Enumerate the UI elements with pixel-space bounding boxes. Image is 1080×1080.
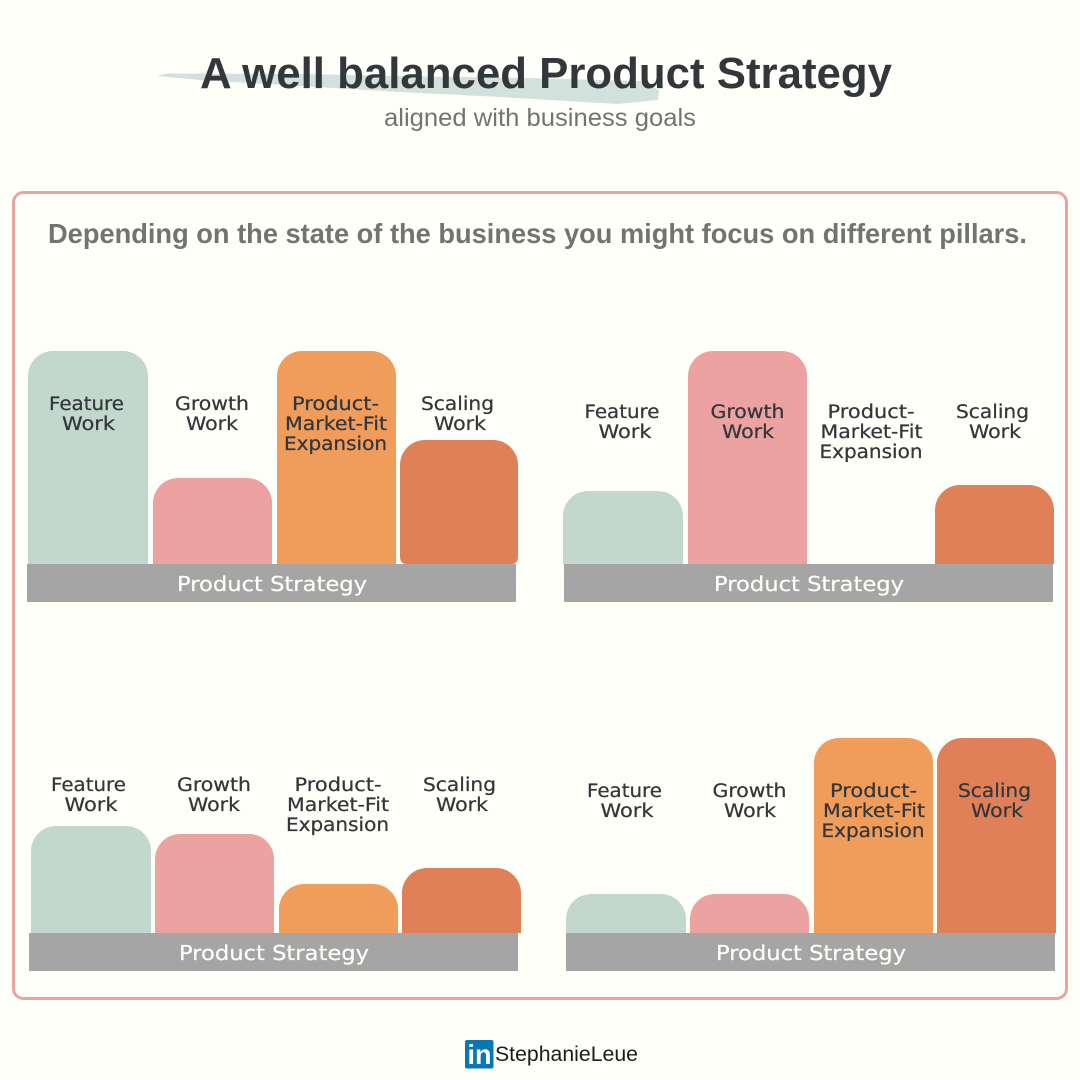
bar: growth work: [690, 894, 809, 933]
labels: Work: [436, 795, 488, 816]
bar: scaling work: [935, 485, 1054, 564]
labels: Product-: [294, 775, 382, 796]
chart 3: balanced focus: [29, 775, 521, 971]
labels: Work: [188, 795, 240, 816]
labels: Scaling: [421, 394, 494, 415]
labels: [587, 781, 1031, 842]
labels: Growth: [177, 775, 251, 796]
panel heading: Depending on the state of the business you might focus on different pillars.: [48, 218, 1027, 249]
labels: Feature: [584, 402, 660, 423]
labels: Scaling: [958, 781, 1031, 802]
base: product strategy: Product Strategy: [716, 941, 906, 965]
labels: Growth: [710, 402, 784, 423]
bar: feature work: [563, 491, 683, 564]
labels: Work: [186, 414, 238, 435]
labels: Expansion: [820, 442, 922, 463]
base: product strategy: [27, 564, 516, 602]
labels: Feature: [49, 394, 124, 415]
labels: Feature: [587, 781, 662, 802]
labels: [584, 402, 1029, 463]
icon: linkedin: in: [468, 1039, 492, 1070]
bar: growth work: [155, 834, 274, 933]
labels: Work: [598, 422, 652, 443]
labels: Market-Fit: [287, 795, 389, 816]
labels: Work: [600, 801, 654, 822]
base: product strategy: [29, 933, 518, 971]
bar: product-market-fit expansion: [279, 884, 398, 933]
labels: [49, 394, 494, 455]
footer: linkedin handle: [465, 1039, 638, 1070]
base: product strategy: Product Strategy: [179, 941, 369, 965]
labels: Growth: [712, 781, 786, 802]
chart 1: feature and product-market-fit focus: [27, 351, 518, 602]
labels: Expansion: [284, 434, 387, 455]
title: A well balanced Product Strategy: [200, 49, 893, 98]
base: product strategy: [564, 564, 1053, 602]
panel: pillars container: [14, 192, 1066, 998]
labels: Work: [969, 422, 1021, 443]
brush stroke behind title: [157, 74, 659, 104]
chart 4: product-market-fit and scaling focus: [566, 738, 1056, 971]
labels: Scaling: [423, 775, 496, 796]
labels: Work: [62, 414, 115, 435]
subtitle: aligned with business goals: [384, 104, 696, 132]
bar: scaling work: [937, 738, 1056, 933]
header: title and subtitle: [157, 49, 893, 132]
base: product strategy: Product Strategy: [177, 572, 367, 596]
labels: [51, 775, 496, 836]
labels: Market-Fit: [820, 422, 922, 443]
bar: growth work: [153, 478, 272, 564]
labels: Product-: [828, 402, 914, 423]
bar: scaling work: [400, 440, 518, 564]
bar: growth work: [688, 351, 807, 564]
labels: Expansion: [286, 815, 389, 836]
base: product strategy: Product Strategy: [714, 572, 904, 596]
labels: Scaling: [956, 402, 1029, 423]
labels: Work: [724, 801, 776, 822]
labels: Work: [64, 795, 118, 816]
labels: Expansion: [822, 821, 924, 842]
labels: Market-Fit: [285, 414, 387, 435]
handle text: StephanieLeue: [495, 1043, 638, 1066]
labels: Work: [722, 422, 774, 443]
chart 2: growth focus: [563, 351, 1054, 602]
labels: Growth: [175, 394, 249, 415]
labels: Product-: [830, 781, 917, 802]
labels: Market-Fit: [823, 801, 925, 822]
bar: feature work: [566, 894, 686, 933]
labels: Product-: [292, 394, 379, 415]
base: product strategy: [566, 933, 1055, 971]
bar: product-market-fit expansion: [814, 738, 933, 933]
bar: product-market-fit expansion: [277, 351, 396, 564]
bar: feature work: [28, 351, 148, 564]
labels: Feature: [51, 775, 126, 796]
bar: scaling work: [402, 868, 521, 933]
bar: feature work: [31, 826, 151, 933]
labels: Work: [434, 414, 486, 435]
labels: Work: [971, 801, 1023, 822]
